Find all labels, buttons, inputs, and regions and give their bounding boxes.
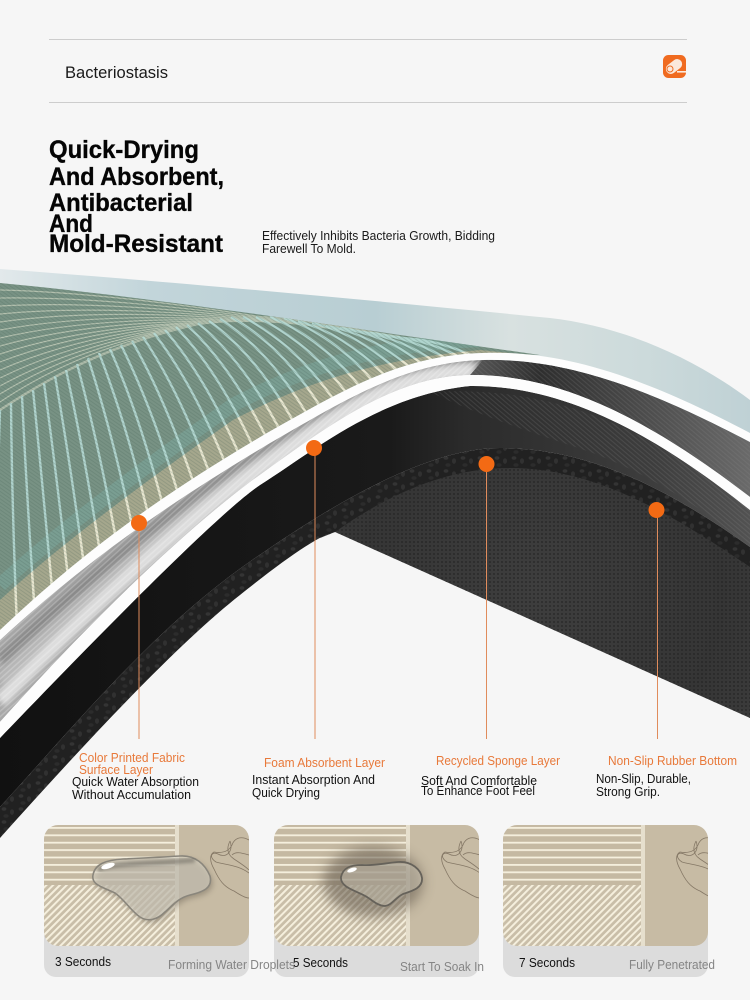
- layer: color printed fabric: [0, 283, 540, 630]
- callout pointers: [131, 440, 664, 739]
- layer: rubber bottom: [320, 462, 750, 718]
- caption: 5 Seconds: [293, 956, 348, 970]
- mat cross-section illustration: [0, 269, 750, 838]
- title: Quick-Drying: [49, 136, 199, 164]
- label: color printed fabric: Color Printed Fabric: [79, 751, 185, 765]
- layer: clear top film: [0, 269, 750, 445]
- subtitle: [262, 229, 495, 256]
- water droplet: [93, 856, 213, 923]
- header bar: [49, 39, 687, 103]
- label: non-slip rubber bottom: Non-Slip Rubber Bottom: [608, 754, 737, 768]
- label: recycled sponge layer: [421, 754, 560, 798]
- pointer: rubber bottom: [648, 502, 664, 739]
- card: 7 seconds: Fully Penetrated: [629, 958, 715, 972]
- layer: sponge underside: [0, 386, 750, 807]
- subtitle: Farewell To Mold.: [262, 242, 356, 256]
- pointer: sponge layer: [478, 456, 494, 739]
- water droplet: [341, 862, 422, 906]
- label: color printed fabric: Quick Water Absorption: [72, 775, 199, 789]
- label: non-slip rubber bottom: Non-Slip, Durable,: [596, 772, 691, 786]
- label: recycled sponge layer: To Enhance Foot Feel: [421, 784, 535, 798]
- white band: upper: [0, 353, 750, 640]
- pointer: foam layer: [306, 440, 322, 739]
- pointer: fabric surface: [131, 515, 147, 739]
- soak shadow: [323, 847, 423, 917]
- label: non-slip rubber bottom: [596, 754, 737, 799]
- subtitle: Effectively Inhibits Bacteria Growth, Bidding: [262, 229, 495, 243]
- caption: 3 Seconds: [55, 955, 111, 969]
- label: color printed fabric: [72, 751, 199, 802]
- title: And: [49, 210, 93, 238]
- label: foam absorbent layer: Instant Absorption And: [252, 773, 375, 787]
- label: color printed fabric: Surface Layer: [79, 763, 153, 777]
- header label: Bacteriostasis: [65, 64, 168, 82]
- white band: lower: [0, 375, 750, 738]
- card: 5 seconds: [265, 825, 490, 977]
- title: [49, 136, 224, 258]
- label: recycled sponge layer: Soft And Comfortable: [421, 774, 537, 788]
- layer: recycled sponge edge: [0, 448, 750, 838]
- label: recycled sponge layer: Recycled Sponge Layer: [436, 754, 560, 768]
- title: And Absorbent,: [49, 163, 224, 191]
- title: Mold-Resistant: [49, 230, 224, 258]
- title: Antibacterial: [49, 189, 193, 217]
- card: 3 seconds: Forming Water Droplets: [168, 958, 295, 972]
- label: foam absorbent layer: Quick Drying: [252, 786, 320, 800]
- card: 7 seconds: [500, 825, 725, 977]
- card: 5 seconds: Start To Soak In: [400, 960, 484, 974]
- droplet highlight: [347, 867, 357, 873]
- label: non-slip rubber bottom: Strong Grip.: [596, 785, 660, 799]
- card: 3 seconds: [34, 825, 295, 977]
- icon: pill: [663, 55, 686, 78]
- caption: 7 Seconds: [519, 956, 575, 970]
- label: foam absorbent layer: Foam Absorbent Layer: [264, 756, 385, 770]
- label: color printed fabric: Without Accumulation: [72, 788, 191, 802]
- label: foam absorbent layer: [252, 756, 385, 800]
- layer: foam absorbent: [0, 350, 750, 730]
